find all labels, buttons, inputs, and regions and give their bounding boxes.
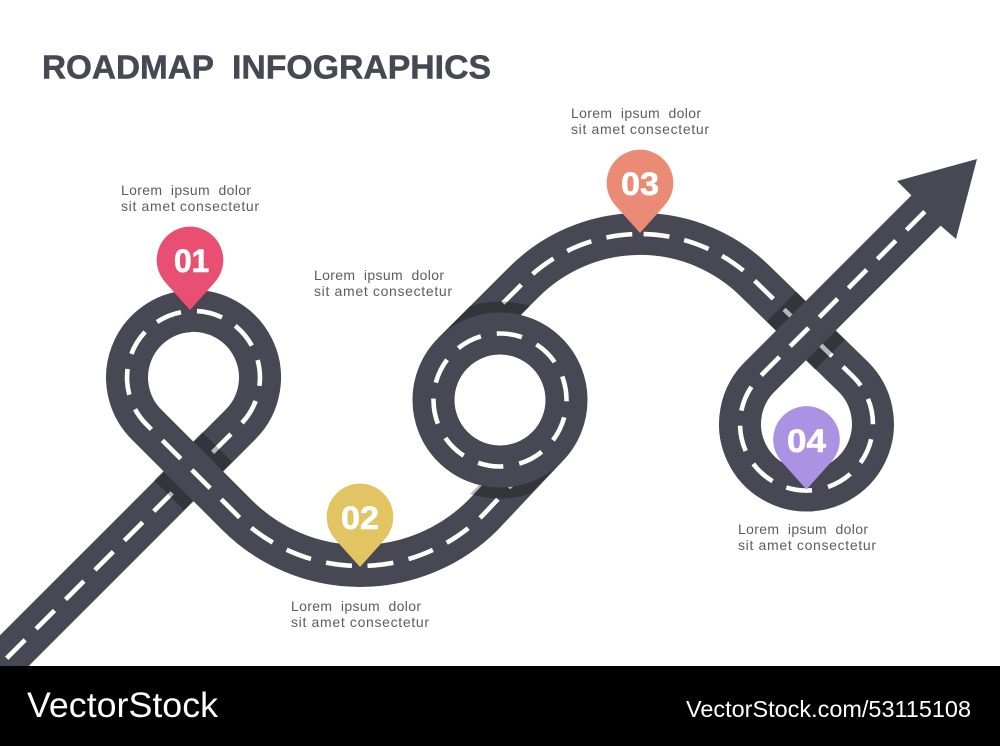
caption: roundabout bbox=[314, 267, 452, 299]
caption 01: Lorem ipsum dolor bbox=[121, 182, 251, 198]
title: INFOGRAPHICS bbox=[232, 48, 491, 86]
crossing shadow: roundabout bbox=[438, 302, 562, 498]
caption 04 bbox=[738, 521, 876, 553]
road bbox=[0, 206, 930, 690]
title: ROADMAP bbox=[42, 48, 214, 86]
caption 04: sit amet consectetur bbox=[738, 537, 876, 553]
caption 02: Lorem ipsum dolor bbox=[291, 598, 421, 614]
pin 04: 04 bbox=[787, 423, 826, 459]
road segment: valley bbox=[127, 311, 547, 566]
arrow head bbox=[897, 159, 977, 239]
caption: roundabout: sit amet consectetur bbox=[314, 283, 452, 299]
caption 03: Lorem ipsum dolor bbox=[571, 105, 701, 121]
road segment: entry and first loop bbox=[0, 311, 260, 690]
pin 04 bbox=[773, 406, 840, 490]
pin 03: 03 bbox=[621, 166, 659, 202]
pin 01 bbox=[157, 227, 223, 310]
roundabout ring bbox=[434, 334, 566, 466]
caption: roundabout: Lorem ipsum dolor bbox=[314, 267, 444, 283]
crossing shadow: last loop bbox=[767, 292, 845, 370]
footer image id: VectorStock.com/53115108 bbox=[686, 696, 971, 722]
caption 03 bbox=[571, 105, 709, 137]
caption 01: sit amet consectetur bbox=[121, 198, 259, 214]
pin 01: 0 bbox=[174, 243, 192, 279]
pin 01: 1 bbox=[192, 243, 209, 279]
caption 01 bbox=[121, 182, 259, 214]
caption 02 bbox=[291, 598, 429, 630]
caption 04: Lorem ipsum dolor bbox=[738, 521, 868, 537]
caption 02: sit amet consectetur bbox=[291, 614, 429, 630]
pin 02: 02 bbox=[341, 500, 379, 536]
road segment: hill and third loop bbox=[453, 234, 873, 490]
crossing shadow: first loop bbox=[154, 432, 232, 510]
pin 03 bbox=[607, 150, 673, 233]
caption 03: sit amet consectetur bbox=[571, 121, 709, 137]
footer brand: VectorStock bbox=[27, 686, 219, 725]
road segment: final straight bbox=[740, 206, 930, 491]
pin 02 bbox=[327, 484, 393, 567]
footer bar bbox=[0, 666, 1000, 746]
